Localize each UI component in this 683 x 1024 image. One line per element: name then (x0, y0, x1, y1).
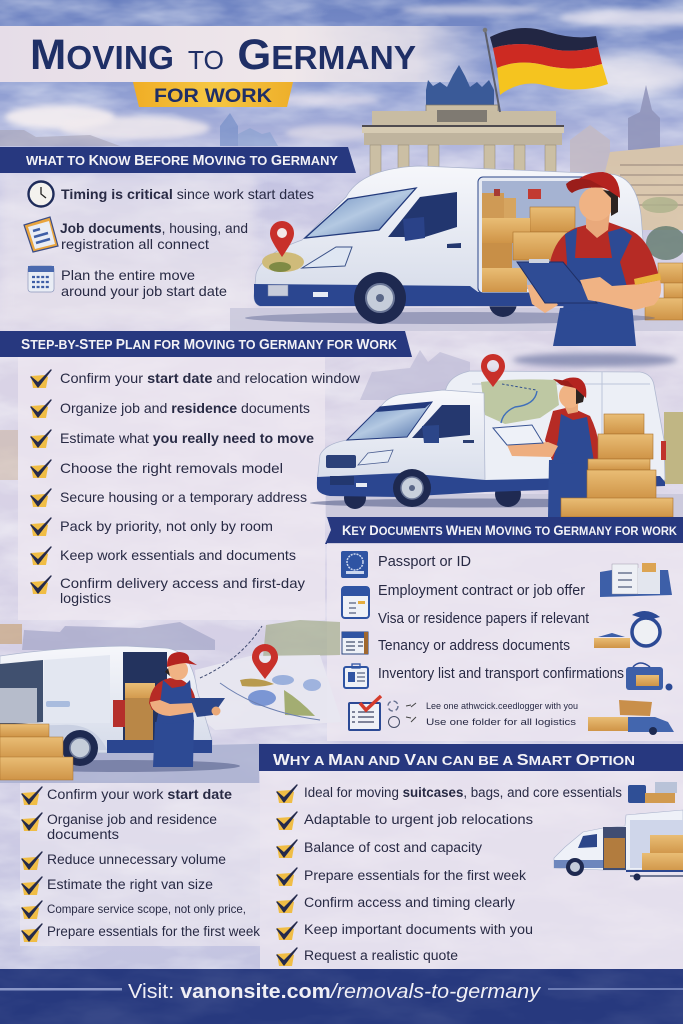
reason 4: Prepare essentials for the first week (304, 868, 526, 883)
subtitle banner: FOR WORK (154, 85, 272, 107)
subtitle banner (133, 82, 293, 107)
step 8: Confirm delivery access and first-day (60, 575, 305, 591)
step 2: Organize job and residence documents (60, 400, 310, 416)
third stacked boxes (0, 724, 73, 780)
title band (0, 26, 490, 82)
van with cargo (245, 166, 655, 324)
icon: inventory (344, 664, 368, 688)
reason 7: Request a realistic quote (304, 948, 458, 963)
ground under second van (326, 494, 683, 518)
illustration: folders (600, 563, 672, 597)
footer link text: Visit: vanonsite.com /removals-to-germany (128, 981, 541, 1003)
icon: checklist (349, 696, 381, 730)
item 5 (22, 901, 246, 919)
worker with clipboard (517, 172, 661, 346)
route map (481, 379, 559, 424)
reason 3 (277, 840, 482, 858)
icon: calendar (28, 266, 54, 292)
step 3: Estimate what you really need to move (60, 430, 314, 446)
step 8 (31, 575, 305, 606)
step 4: Choose the right removals model (60, 460, 283, 476)
key documents heading: KEY DOCUMENTS WHEN MOVING TO GERMANY FOR WORK (342, 522, 677, 538)
key documents heading (325, 517, 683, 544)
step 7: Keep work essentials and documents (60, 547, 296, 563)
location pin (481, 354, 505, 387)
location pin (252, 644, 278, 679)
distant scenery behind second van (0, 350, 683, 484)
title: MOVING TO GERMANY (30, 31, 416, 79)
illustration: parcels (628, 782, 677, 803)
reason 6 (277, 922, 533, 940)
third worker (149, 652, 225, 767)
icon: documents (24, 217, 58, 252)
item 3: Reduce unnecessary volume (47, 852, 226, 867)
reason 2 (277, 812, 533, 830)
item 4 (22, 877, 213, 895)
boxes right of van (645, 263, 683, 320)
panel: key documents (327, 543, 683, 741)
illustration: delivery van (554, 810, 683, 880)
icon: passport (341, 551, 368, 578)
ground third scene (0, 742, 330, 783)
step 8: logistics (60, 590, 111, 606)
item 1: Confirm your work start date (47, 787, 233, 802)
step-by-step heading: STEP-BY-STEP PLAN FOR MOVING TO GERMANY FOR WORK (21, 337, 398, 353)
item 2 (22, 812, 217, 842)
distant city right (570, 85, 683, 260)
text: job documents (60, 220, 248, 252)
ground under first van (230, 308, 683, 331)
Brandenburg Gate (362, 65, 564, 180)
heading: what to know (0, 147, 356, 173)
panel: step-by-step plan (18, 357, 361, 620)
text: timing: Timing is critical since work start dates (61, 186, 314, 202)
reason 1: Ideal for moving suitcases, bags, and core essentials (304, 785, 622, 800)
small options: Use one folder for all logistics (426, 717, 576, 728)
cargo hold (478, 177, 590, 293)
second worker (493, 378, 599, 517)
small options (388, 701, 578, 728)
panel: left checklist (20, 783, 260, 946)
third scene: map (195, 626, 342, 730)
text: contract: Employment contract or job offer (378, 583, 585, 599)
heading: what to know: WHAT TO KNOW BEFORE MOVING TO GERMANY (26, 153, 338, 169)
icon: clock (28, 182, 54, 206)
footer bar (0, 969, 683, 1024)
step 6: Pack by priority, not only by room (60, 518, 273, 534)
what to know panel (0, 147, 356, 323)
illustration: clock and boxes (594, 611, 660, 648)
text: tenancy: Tenancy or address documents (378, 638, 570, 654)
text: plan the move (61, 267, 227, 299)
panel: man and van reasons (260, 771, 683, 969)
text: passport: Passport or ID (378, 554, 471, 570)
illustration: bag with parcels (626, 663, 672, 690)
icon: contract (342, 587, 369, 618)
man and van heading: WHY A MAN AND VAN CAN BE A SMART OPTION (273, 752, 635, 769)
item 4: Estimate the right van size (47, 877, 213, 892)
icon: tenancy (342, 632, 368, 654)
reason 2: Adaptable to urgent job relocations (304, 812, 533, 827)
step 5: Secure housing or a temporary address (60, 489, 307, 505)
reason 6: Keep important documents with you (304, 922, 533, 937)
text: plan the move: Plan the entire move (61, 267, 195, 283)
stacked boxes second van (561, 414, 673, 517)
reason 7 (277, 948, 458, 966)
third van (0, 646, 240, 772)
man and van heading (259, 744, 683, 771)
text: inventory: Inventory list and transport confirmations (378, 666, 624, 682)
reason 3: Balance of cost and capacity (304, 840, 482, 855)
step-by-step heading (0, 331, 412, 357)
text: job documents: Job documents, housing, and (60, 220, 248, 236)
reason 5: Confirm access and timing clearly (304, 895, 515, 910)
illustration: van with parcels (588, 700, 674, 735)
distant city left (0, 113, 278, 146)
small options: Lee one athwcick.ceedlogger with you (426, 701, 578, 712)
item 6: Prepare essentials for the first week (47, 924, 260, 939)
location pin on van (262, 221, 304, 272)
item 2: documents (47, 827, 119, 842)
item 5: Compare service scope, not only price, (47, 902, 246, 916)
second van with map (310, 354, 666, 509)
distant city third scene (0, 620, 340, 657)
item 2: Organise job and residence (47, 812, 217, 827)
text: job documents: registration all connect (61, 236, 209, 252)
text: visa: Visa or residence papers if relevant (378, 611, 589, 627)
step 1: Confirm your start date and relocation window (60, 370, 361, 386)
text: plan the move: around your job start date (61, 283, 227, 299)
German flag (483, 28, 608, 112)
